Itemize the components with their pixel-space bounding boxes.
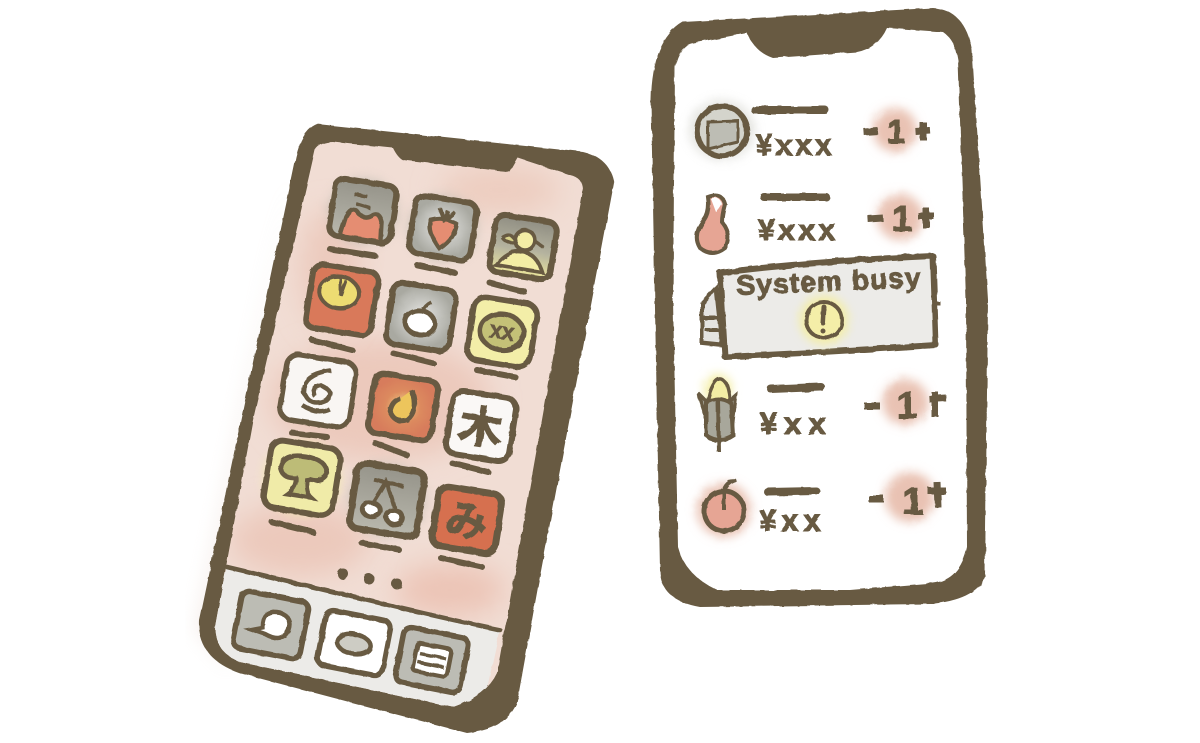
item icon: gourd xyxy=(697,196,728,253)
icon: person app xyxy=(488,214,558,280)
screen wallpaper xyxy=(214,142,583,707)
item icon: persimmon xyxy=(704,480,744,531)
page dots xyxy=(338,568,402,590)
app name labels xyxy=(272,249,525,567)
phone body xyxy=(199,124,614,733)
row 4: item with quantity stepper: 1 xyxy=(902,481,924,523)
illustration: two hand-drawn phones xyxy=(196,8,988,733)
dock divider xyxy=(227,567,500,630)
icon: tree kanji app: 木 xyxy=(455,401,506,456)
row 4: item with quantity stepper xyxy=(697,472,946,538)
halo behind left phone xyxy=(195,170,290,670)
icon: book app xyxy=(322,172,404,250)
phone: order list with error popup xyxy=(651,8,988,607)
row 1: item with quantity stepper: ¥xxx xyxy=(756,129,835,162)
row 3: item with quantity stepper: ¥xx xyxy=(760,406,833,441)
icon: coin app: XX xyxy=(488,321,515,345)
popup title: System busy xyxy=(736,262,922,301)
icon: card dock app xyxy=(394,626,470,694)
icon: chat dock app xyxy=(232,590,310,660)
icon: oval dock app xyxy=(316,609,392,677)
item icon: plate xyxy=(697,106,747,156)
row 1: item with quantity stepper xyxy=(689,100,930,162)
row 2: item with quantity stepper: 1 xyxy=(892,198,912,239)
row 3: item with quantity stepper: 1 xyxy=(896,385,918,427)
phone: home screen with app grid xyxy=(190,124,620,740)
popup: system busy xyxy=(720,256,941,357)
row 3: item with quantity stepper xyxy=(698,374,946,452)
row 2: item with quantity stepper: ¥xxx xyxy=(758,214,839,247)
icon: kana app: み xyxy=(442,495,491,548)
phone body xyxy=(651,8,988,607)
icon: apple app xyxy=(385,281,457,353)
screen xyxy=(673,28,967,590)
row 4: item with quantity stepper: ¥xx xyxy=(759,503,826,538)
dock panel xyxy=(214,569,500,707)
icon: clock app xyxy=(304,263,380,337)
icon: mushroom app xyxy=(259,436,345,520)
icon: kana app xyxy=(431,485,503,555)
icon: coin app xyxy=(465,295,539,369)
icon: cherries app xyxy=(342,456,432,544)
icon: flame app xyxy=(367,372,439,442)
icon: warning xyxy=(800,296,848,344)
icon: swirl app xyxy=(278,353,358,429)
icon: tree kanji app xyxy=(444,389,518,463)
popup shadowed row icon xyxy=(702,288,722,345)
row 2: item with quantity stepper xyxy=(697,194,934,253)
item icon: corn xyxy=(698,379,736,452)
row 1: item with quantity stepper: 1 xyxy=(887,113,905,150)
icon: strawberry app xyxy=(402,189,484,267)
